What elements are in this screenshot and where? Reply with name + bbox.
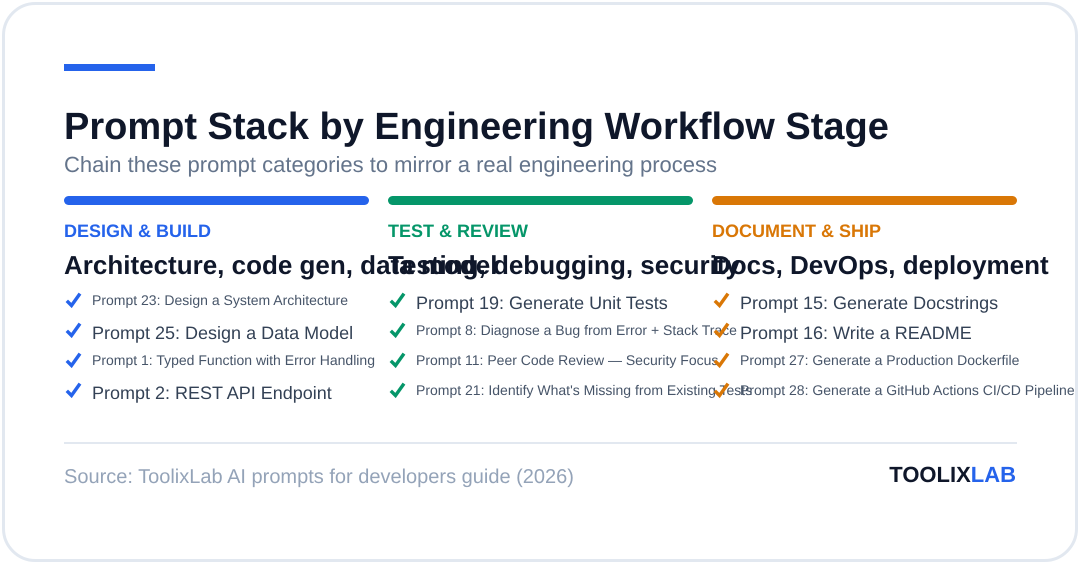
panel: document and ship	[712, 196, 1075, 398]
item: prompt 25: Prompt 25: Design a Data Model	[92, 323, 353, 343]
logo: TOOLIXLAB	[889, 462, 1016, 487]
item: prompt 8: Prompt 8: Diagnose a Bug from Error + Stack Trace	[416, 322, 737, 338]
label: document and ship: DOCUMENT & SHIP	[712, 221, 881, 241]
item: prompt 28: Prompt 28: Generate a GitHub Actions CI/CD Pipeline	[740, 382, 1075, 398]
subtitle: Chain these prompt categories to mirror a real engineering process	[64, 152, 717, 177]
accent bar	[64, 64, 155, 71]
item: prompt 15: Prompt 15: Generate Docstrings	[740, 293, 998, 313]
item: prompt 16: Prompt 16: Write a README	[740, 323, 972, 343]
column bar: document	[712, 196, 1017, 205]
item: prompt 1: Prompt 1: Typed Function with Error Handling	[92, 352, 375, 368]
panel: test and review	[388, 196, 752, 398]
panel: design and build	[64, 196, 497, 403]
title: Prompt Stack by Engineering Workflow Stage	[64, 106, 889, 148]
label: test and review: TEST & REVIEW	[388, 221, 528, 241]
label: design and build: DESIGN & BUILD	[64, 221, 211, 241]
source note: Source: ToolixLab AI prompts for developers guide (2026)	[64, 466, 574, 488]
item: prompt 11: Prompt 11: Peer Code Review — Security Focus	[416, 352, 718, 368]
item: prompt 2: Prompt 2: REST API Endpoint	[92, 383, 332, 403]
heading: test: Testing, debugging, security	[388, 250, 741, 280]
item: prompt 27: Prompt 27: Generate a Production Dockerfile	[740, 352, 1020, 368]
heading: document: Docs, DevOps, deployment	[712, 250, 1049, 280]
heading: design: Architecture, code gen, data model	[64, 250, 497, 280]
item: prompt 23: Prompt 23: Design a System Architecture	[92, 292, 348, 308]
column bar: design	[64, 196, 369, 205]
column bar: test	[388, 196, 693, 205]
item: prompt 19: Prompt 19: Generate Unit Tests	[416, 293, 668, 313]
item: prompt 21: Prompt 21: Identify What's Missing from Existing Tests	[416, 382, 752, 398]
